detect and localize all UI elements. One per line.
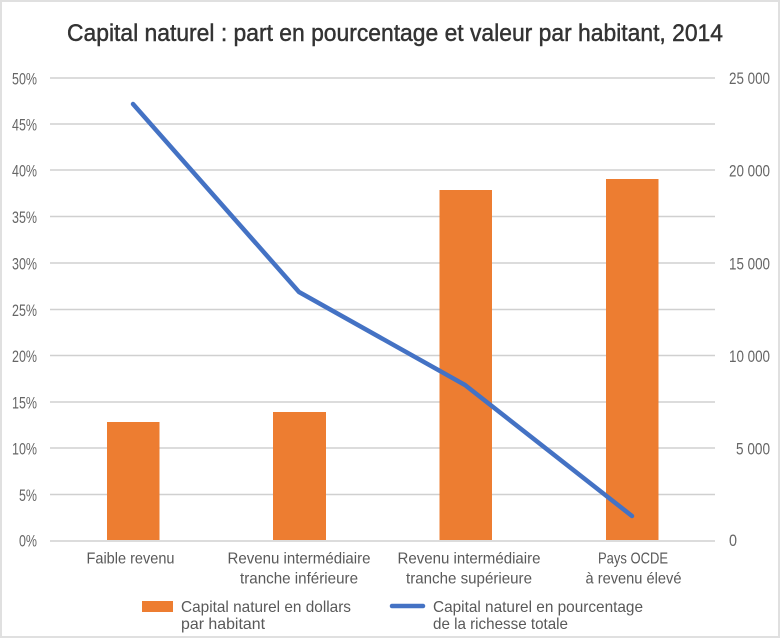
right axis: dollars: 20 000 (729, 162, 770, 180)
left axis: percentage: 30% (12, 254, 37, 274)
legend: line: de la richesse totale (433, 616, 568, 633)
left axis: percentage: 25% (12, 301, 37, 320)
legend: line: Capital naturel en pourcentage (433, 599, 643, 616)
left axis: percentage: 0% (19, 532, 37, 550)
legend: line (392, 599, 643, 633)
left axis: percentage: 10% (12, 440, 37, 458)
right axis: dollars: 5 000 (736, 440, 770, 458)
legend: bars (142, 599, 351, 633)
category labels: Revenu intermédiaire (398, 550, 541, 568)
category labels: Revenu intermédiaire (228, 550, 371, 568)
right axis: dollars: 0 (729, 531, 737, 550)
line: natural capital share of wealth (133, 104, 632, 516)
category labels: Faible revenu (86, 550, 174, 568)
left axis: percentage: 40% (12, 162, 37, 180)
title: Capital naturel : part en pourcentage et valeur par habitant, 2014 (67, 20, 723, 47)
right axis: dollars (729, 69, 770, 550)
left axis: percentage: 15% (12, 394, 37, 412)
left axis: percentage: 5% (19, 486, 37, 505)
left axis: percentage: 45% (12, 116, 37, 134)
left axis: percentage: 20% (12, 347, 37, 366)
category labels: à revenu élevé (586, 570, 682, 588)
category labels (86, 550, 682, 588)
bars: natural capital per capita (107, 179, 658, 540)
right axis: dollars: 15 000 (729, 254, 770, 274)
category labels: tranche inférieure (240, 570, 358, 588)
left axis: percentage: 50% (12, 70, 37, 88)
left axis: percentage (12, 70, 37, 550)
right axis: dollars: 10 000 (729, 347, 770, 366)
legend: bars: par habitant (181, 616, 266, 633)
left axis: percentage: 35% (12, 208, 37, 227)
right axis: dollars: 25 000 (729, 69, 770, 88)
category labels: Pays OCDE (598, 550, 668, 568)
category labels: tranche supérieure (406, 570, 532, 588)
legend: bars: Capital naturel en dollars (181, 599, 351, 616)
